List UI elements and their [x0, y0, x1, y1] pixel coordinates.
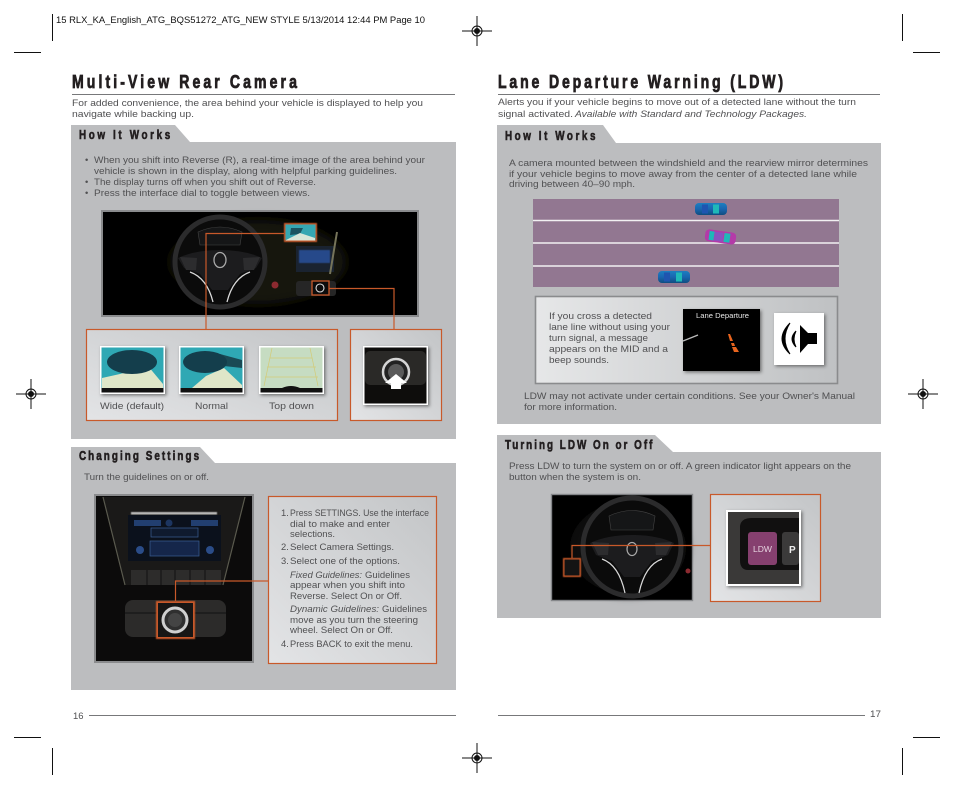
car: centered bottom: [658, 271, 690, 283]
instruction text: [509, 460, 851, 482]
intro text left: [72, 97, 423, 119]
panel: turning LDW on or off: [497, 435, 881, 618]
panel: settings steps: 1.: [281, 507, 289, 518]
icon: press arrow: [385, 374, 407, 389]
panel: settings steps: Select Camera Settings.: [290, 541, 394, 552]
alert text: turn signal, a message: [549, 332, 648, 343]
page number 16: 16: [73, 710, 84, 721]
view labels: Normal: [195, 400, 228, 411]
steering wheel photo: [552, 494, 692, 600]
intro text right: Alerts you if your vehicle begins to move out of a detected lane without the turn: [498, 96, 856, 107]
tab heading panel shape: [497, 435, 881, 618]
heading: How It Works: How It Works: [79, 129, 170, 142]
bullet list: •: [85, 176, 88, 187]
view labels: Wide (default): [100, 400, 164, 411]
description text: A camera mounted between the windshield and the rearview mirror determines: [509, 157, 868, 168]
panel: interface dial: [350, 330, 442, 420]
panel: settings steps: Press SETTINGS. Use the interface: [290, 507, 429, 518]
alert text: appears on the MID and a: [549, 343, 669, 354]
car: departing lane: [704, 229, 737, 245]
instruction text: button when the system is on.: [509, 471, 641, 482]
heading: Turning LDW On or Off: Turning LDW On or Off: [505, 439, 653, 452]
panel: settings steps: Guidelines: [365, 569, 410, 580]
MID display: Lane Departure: [696, 311, 749, 320]
panel: settings steps: Dynamic Guidelines:: [290, 603, 379, 614]
bullet list: •: [85, 187, 88, 198]
print slug line: 15 RLX_KA_English_ATG_BQS51272_ATG_NEW STYLE 5/13/2014 12:44 PM Page 10: [56, 15, 425, 25]
page number 17: 17: [870, 708, 881, 719]
panel: settings steps: appear when you shift into: [290, 579, 405, 590]
bullet list: vehicle is shown in the display, along with helpful parking guidelines.: [94, 165, 397, 176]
title: Multi-View Rear Camera: Multi-View Rear Camera: [72, 72, 298, 93]
title rule right: [498, 94, 880, 95]
view labels: [100, 400, 314, 411]
panel: settings steps: Guidelines: [382, 603, 427, 614]
LDW note: [524, 390, 855, 412]
intro text left: For added convenience, the area behind your vehicle is displayed to help you: [72, 97, 423, 108]
panel: settings steps: [268, 496, 436, 664]
dashboard photo: [102, 211, 418, 316]
bullet list: The display turns off when you shift out of Reverse.: [94, 176, 316, 187]
alert text: beep sounds.: [549, 354, 609, 365]
connector line: [176, 581, 268, 601]
bullet list: Press the interface dial to toggle between views.: [94, 187, 310, 198]
LDW button photo: [726, 510, 801, 586]
bullet list: •: [85, 154, 88, 165]
thumbnail: normal: [179, 346, 244, 394]
title rule left: [72, 94, 455, 95]
panel: settings steps: Fixed Guidelines:: [290, 569, 362, 580]
LDW note: LDW may not activate under certain conditions. See your Owner's Manual: [524, 390, 855, 401]
car: centered top: [695, 203, 727, 215]
instruction text: Press LDW to turn the system on or off. A green indicator light appears on the: [509, 460, 851, 471]
MID display: [683, 309, 760, 371]
connector lines: [206, 234, 394, 329]
footer rule left: [89, 715, 456, 716]
heading: How It Works: How It Works: [505, 130, 595, 143]
footer rule right: [498, 715, 865, 716]
LDW note: for more information.: [524, 401, 617, 412]
panel: LDW button: [710, 494, 820, 602]
view labels: Top down: [269, 400, 314, 411]
intro text right: Available with Standard and Technology Packages.: [574, 108, 807, 119]
panel: settings steps: Select one of the options.: [290, 555, 400, 566]
panel: lane departure alert: [536, 296, 838, 384]
bullet list: When you shift into Reverse (R), a real-time image of the area behind your: [94, 154, 425, 165]
description text: [509, 157, 868, 189]
alert text: If you cross a detected: [549, 310, 652, 321]
panel: how it works, rear camera: [71, 125, 456, 439]
guidelines text: Turn the guidelines on or off.: [84, 471, 209, 482]
description text: if your vehicle begins to move away from the center of a detected lane while: [509, 168, 857, 179]
panel: settings steps: wheel. Select On or Off.: [289, 624, 393, 635]
panel: settings steps: 2.: [281, 541, 289, 552]
panel: settings steps: selections.: [290, 528, 335, 539]
bullet list: [85, 154, 425, 198]
title: Lane Departure Warning: Lane Departure Warning (LDW): [498, 72, 783, 93]
panel: settings steps: dial to make and enter: [290, 518, 390, 529]
thumbnail: top down: [259, 346, 324, 394]
connector line: [572, 546, 710, 558]
panel: camera views: [86, 330, 338, 420]
tab heading panel shape: [497, 125, 881, 424]
tab heading panel shape: [71, 125, 456, 439]
dial photo: [363, 346, 428, 405]
intro text right: signal activated.: [498, 108, 573, 119]
panel: how it works, LDW: [497, 125, 881, 424]
LDW button photo: P: [789, 545, 796, 556]
thumbnail: wide: [100, 346, 165, 394]
alert text: lane line without using your: [549, 321, 670, 332]
panel: settings steps: Reverse. Select On or Off.: [290, 590, 402, 601]
alert text: [549, 310, 670, 365]
icon: speaker beep: [774, 313, 824, 365]
panel: settings steps: 4.: [281, 638, 289, 649]
panel: settings steps: 3.: [281, 555, 289, 566]
heading: Changing Settings: Changing Settings: [79, 450, 199, 463]
console photo: [95, 495, 253, 662]
LDW button photo: LDW: [753, 544, 772, 554]
intro text right: [498, 96, 856, 119]
intro text left: navigate while backing up.: [72, 108, 194, 119]
road diagram: [533, 199, 839, 287]
panel: settings steps: move as you turn the steering: [290, 614, 418, 625]
panel: changing settings: [71, 447, 456, 690]
panel: settings steps: Press BACK to exit the menu.: [290, 638, 413, 649]
description text: driving between 40–90 mph.: [509, 178, 635, 189]
tab heading panel shape: [71, 447, 456, 690]
